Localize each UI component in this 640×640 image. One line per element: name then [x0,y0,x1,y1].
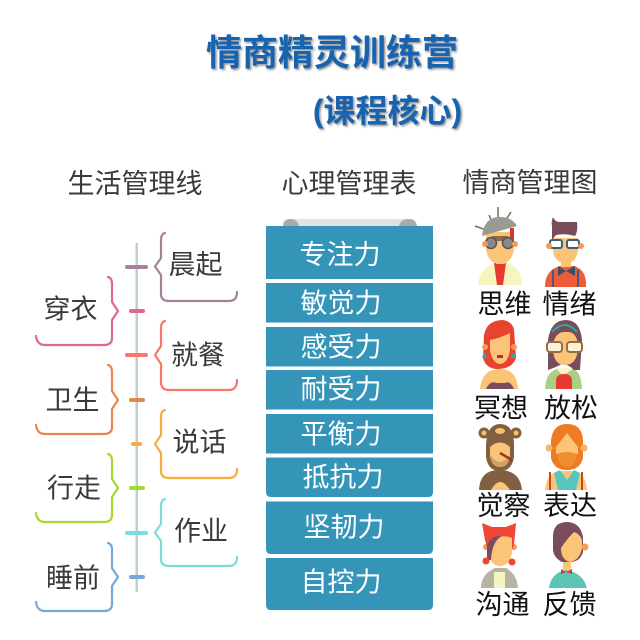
item: 就餐: 就餐 [171,340,225,370]
clipboard top [283,219,417,228]
item: 睡前: 睡前 [46,564,100,594]
label: 思维: 思维 [478,290,532,320]
item: 穿衣 [36,277,145,345]
item: 行走: 行走 [47,474,101,504]
avatar: scientist [475,207,522,285]
bar: 抵抗力: 抵抗力 [302,462,384,492]
label: 表达: 表达 [543,491,597,521]
heading: EQ management: 情商管理图 [462,168,598,198]
avatar: glasses woman [545,320,582,389]
bar: 自控力 [266,558,433,610]
panel: characters [474,207,598,620]
avatar: red-hair woman [480,320,518,389]
item: 就餐 [125,321,237,390]
timeline axis [136,243,138,592]
panel: life timeline [36,233,237,611]
bar: 耐受力 [266,370,433,410]
bar: 自控力: 自控力 [300,568,382,598]
item: 行走 [36,454,145,522]
item: 说话: 说话 [172,428,226,458]
bar: 专注力 [266,226,433,279]
heading: life management: 生活管理线 [68,169,202,199]
bar: 感受力 [266,327,433,366]
label: 冥想: 冥想 [474,394,528,424]
bar: 坚韧力 [266,502,433,554]
item: 作业: 作业 [174,516,228,546]
bar: 坚韧力: 坚韧力 [304,512,384,542]
label: 放松: 放松 [544,394,598,424]
avatar: ginger man [545,424,588,490]
bar: 耐受力: 耐受力 [300,374,382,404]
label: 觉察: 觉察 [476,491,530,521]
item: 卫生: 卫生 [46,386,100,416]
avatar: bear [478,424,522,490]
item: 说话 [131,410,237,478]
label: 沟通: 沟通 [476,590,530,620]
bar: 感受力: 感受力 [300,332,382,362]
bar: 敏觉力: 敏觉力 [300,288,382,318]
label: 情绪: 情绪 [542,290,596,320]
item: 作业 [125,499,237,566]
bar: 敏觉力 [266,283,433,322]
item: 睡前 [36,543,145,611]
avatar: purple hair girl [549,522,588,588]
label: 反馈: 反馈 [542,590,596,620]
item: 卫生 [36,365,145,434]
item: 晨起 [125,233,237,301]
bar: 平衡力 [266,414,433,454]
heading: psychology management: 心理管理表 [282,169,416,199]
item: 晨起: 晨起 [168,250,222,280]
bar: 专注力: 专注力 [300,240,380,270]
avatar: red hat girl [481,523,518,588]
title: 情商精灵训练营 [206,32,458,73]
avatar: glasses man [545,217,586,287]
panel: psychology table [266,219,433,610]
item: 穿衣: 穿衣 [44,294,98,324]
bar: 抵抗力 [266,458,433,497]
bar: 平衡力: 平衡力 [300,420,382,450]
subtitle: (课程核心) [313,93,462,129]
